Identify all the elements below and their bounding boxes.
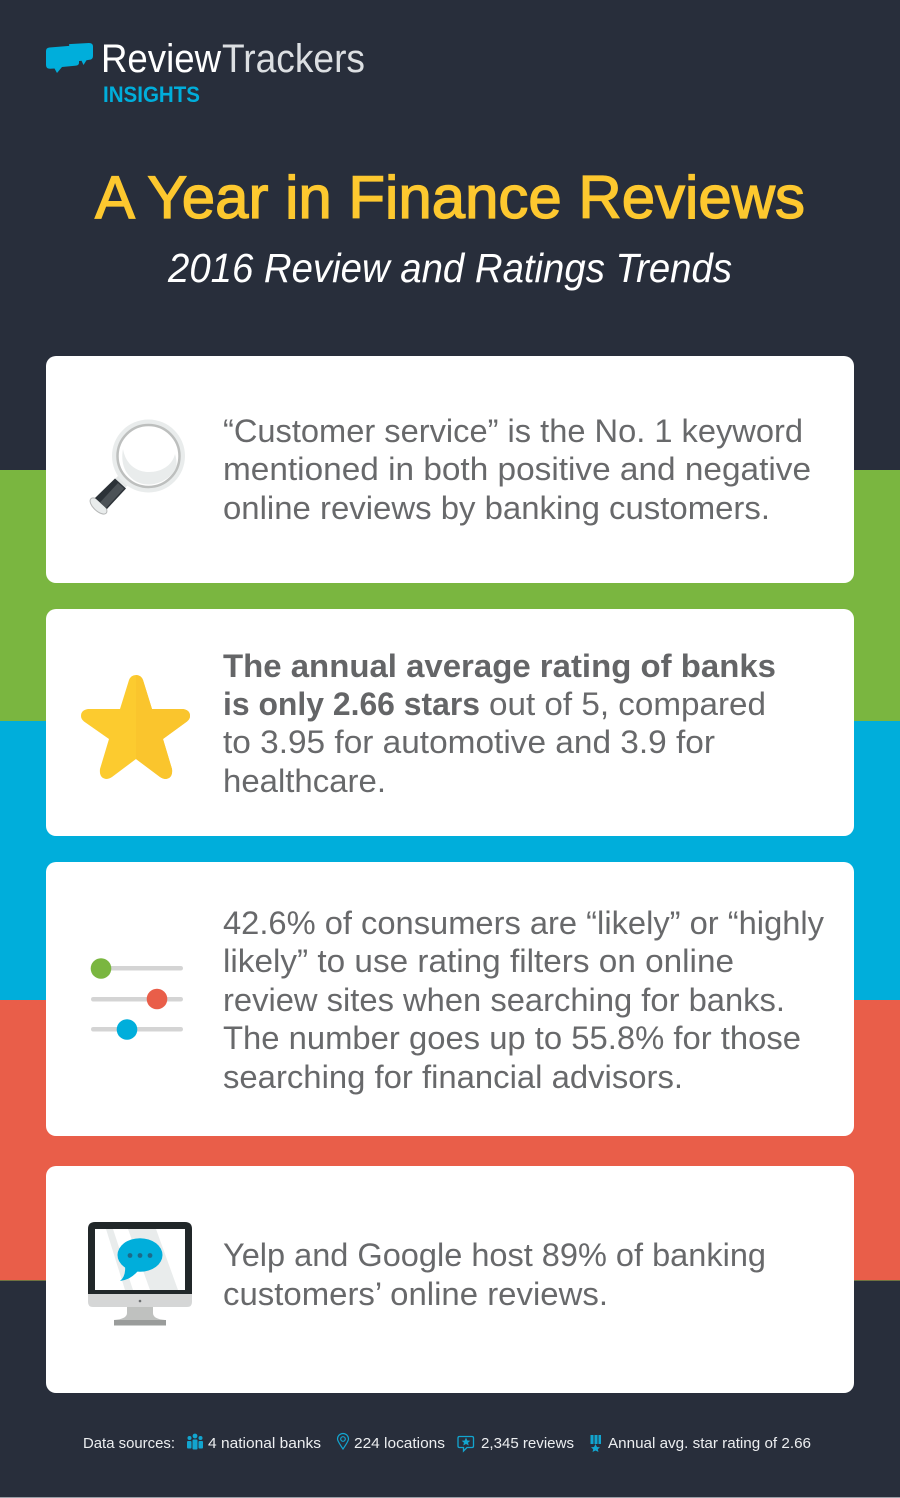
- panel: customer service: [46, 356, 854, 583]
- panel: yelp and google: [46, 1166, 854, 1393]
- icon: speech bubbles: [46, 43, 93, 73]
- icon: location pin: [338, 1434, 349, 1449]
- footer: data sources: [83, 1434, 811, 1452]
- panel: rating filters: [46, 862, 854, 1136]
- text block: likely” to use rating filters on online: [223, 943, 734, 979]
- text block: [223, 648, 776, 799]
- footer: data sources: 2,345 reviews: [481, 1435, 574, 1452]
- title: A Year in Finance Reviews: [95, 164, 805, 231]
- text block: 42.6% of consumers are “likely” or “highly: [223, 905, 825, 941]
- text block: out of 5, compared: [489, 686, 766, 722]
- footer: data sources: Data sources:: [83, 1435, 175, 1452]
- insights label: INSIGHTS: [103, 82, 200, 107]
- footer: data sources: 4 national banks: [208, 1435, 321, 1452]
- text block: online reviews by banking customers.: [223, 490, 770, 526]
- text block: to 3.95 for automotive and 3.9 for: [223, 724, 715, 760]
- icon: sliders: [91, 958, 183, 1040]
- icon: review bubble: [458, 1436, 474, 1451]
- subtitle: 2016 Review and Ratings Trends: [167, 245, 732, 291]
- text block: review sites when searching for banks.: [223, 982, 785, 1018]
- text block: mentioned in both positive and negative: [223, 451, 811, 487]
- text block: searching for financial advisors.: [223, 1059, 683, 1095]
- text block: The number goes up to 55.8% for those: [223, 1020, 801, 1056]
- text block: “Customer service” is the No. 1 keyword: [223, 413, 803, 449]
- logo: Trackers: [222, 37, 365, 81]
- text block: [223, 905, 825, 1095]
- icon: medal: [590, 1435, 601, 1452]
- text block: is only 2.66 stars: [223, 686, 480, 722]
- icon: star: [81, 675, 190, 779]
- icon: monitor: [88, 1222, 192, 1326]
- text block: [223, 1237, 766, 1312]
- band: red: [0, 1000, 900, 1280]
- text block: [223, 413, 811, 526]
- band: blue: [0, 721, 900, 1000]
- icon: people: [187, 1434, 203, 1450]
- text block: The annual average rating of banks: [223, 648, 776, 684]
- text block: Yelp and Google host 89% of banking: [223, 1237, 766, 1273]
- text block: customers’ online reviews.: [223, 1276, 608, 1312]
- wordmark: Review: [101, 37, 221, 81]
- text block: healthcare.: [223, 763, 386, 799]
- footer: data sources: Annual avg. star rating of 2.66: [608, 1435, 811, 1452]
- icon: magnifying glass: [87, 420, 185, 517]
- panel: average rating: [46, 609, 854, 836]
- band: green: [0, 470, 900, 721]
- logo: [46, 37, 365, 107]
- footer: data sources: 224 locations: [354, 1435, 445, 1452]
